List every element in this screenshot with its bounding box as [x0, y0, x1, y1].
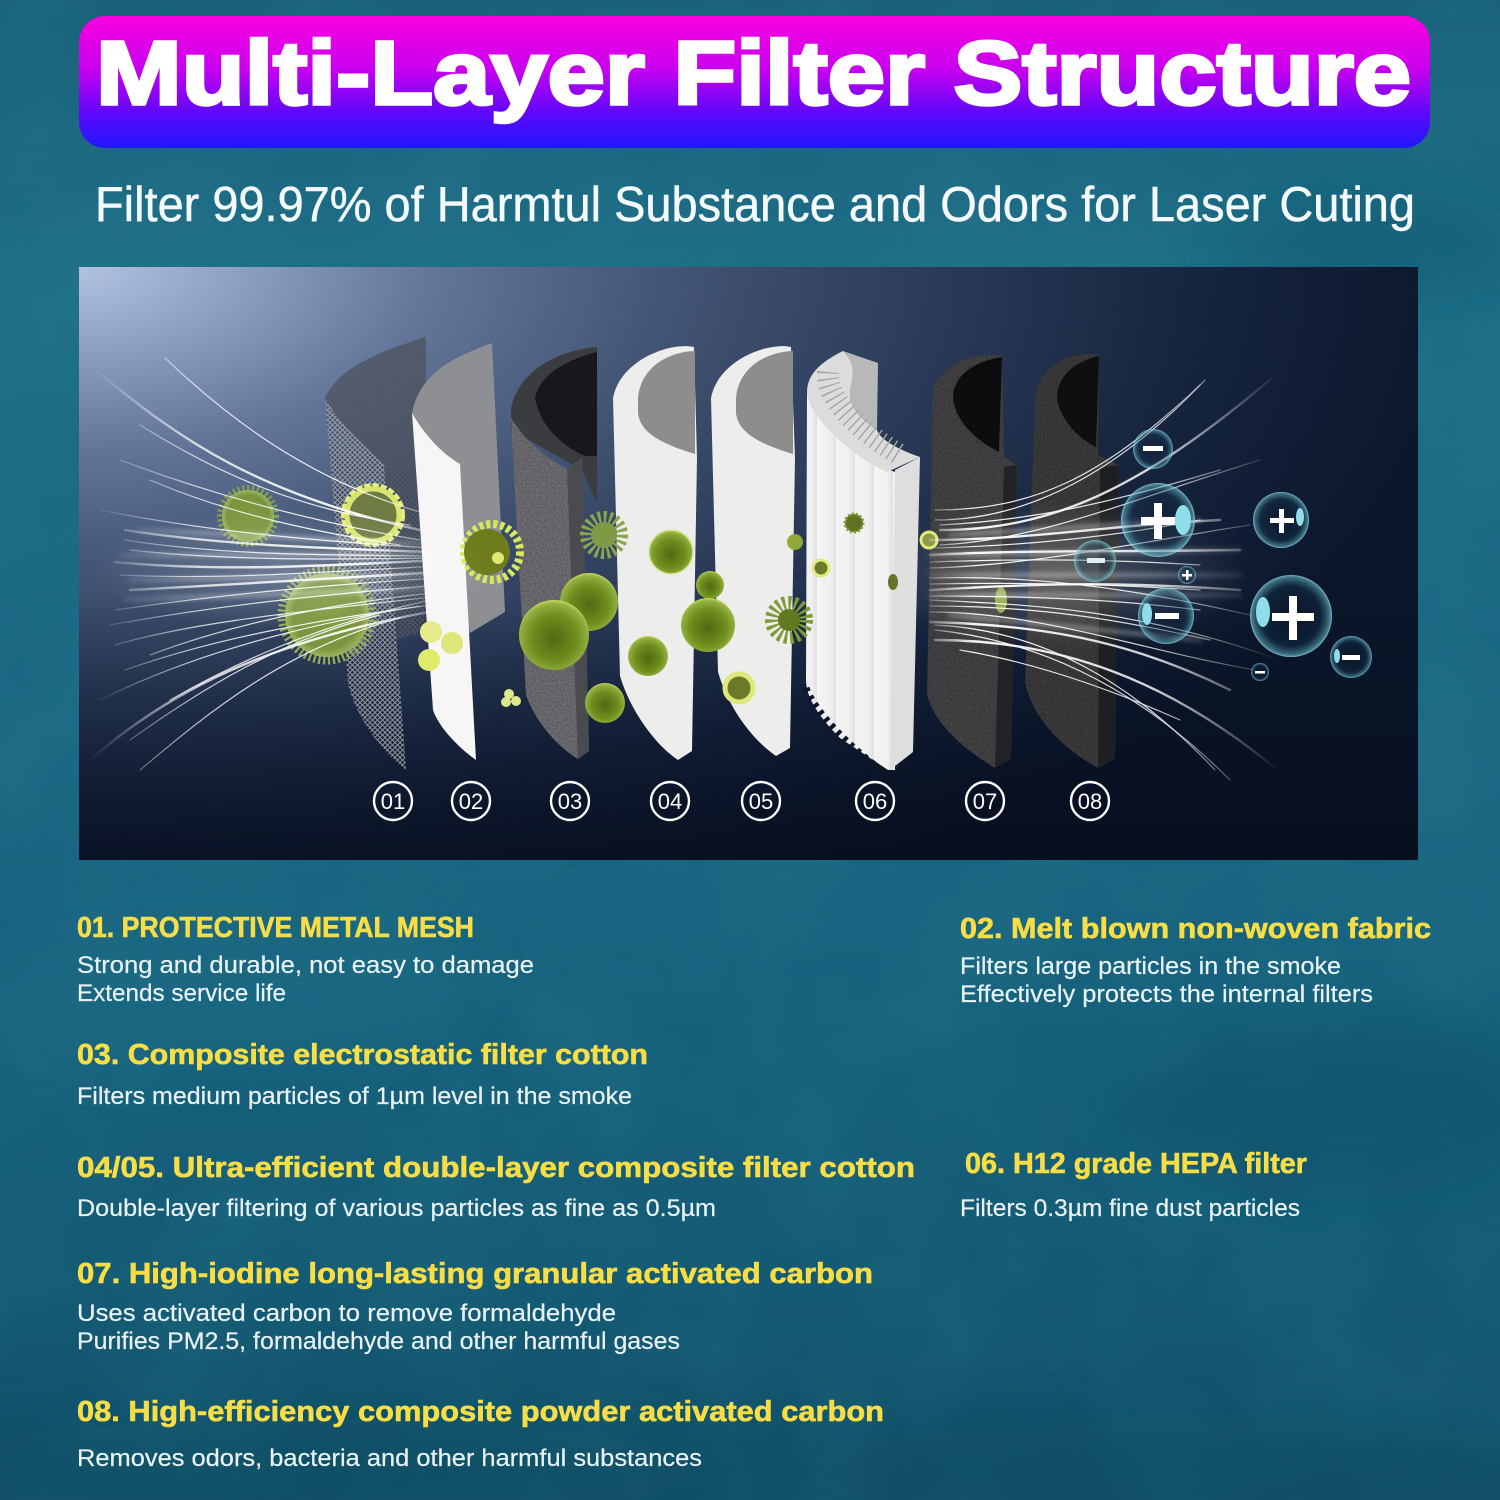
panel: filter layers diagram: [79, 267, 1418, 860]
text block: 01: 01. PROTECTIVE METAL MESH: [77, 912, 474, 944]
yellow pollen clusters: [418, 621, 521, 707]
text block: 08: 08. High-efficiency composite powder activated carbon: [77, 1396, 884, 1428]
number 05: [742, 782, 780, 820]
layer numbers: [374, 782, 1109, 820]
text block: 04/05: [77, 1152, 915, 1222]
number 07: [966, 782, 1004, 820]
ion: tiny plus: [1178, 566, 1196, 584]
subtitle: Filter 99.97% of Harmtul Substance and Odors for Laser Cuting: [95, 178, 1415, 232]
text block: 01: Extends service life: [77, 980, 286, 1007]
germ: large spiky: [285, 573, 369, 657]
ion: minus right: [1330, 636, 1372, 678]
ion: faint minus: [1074, 540, 1116, 582]
text block: 07: [77, 1258, 873, 1355]
text block: 08: Removes odors, bacteria and other harmful substances: [77, 1445, 702, 1472]
germ: ringed on layer 05: [725, 674, 753, 702]
text block: 07: Uses activated carbon to remove formaldehyde: [77, 1300, 616, 1327]
text block: 07: Purifies PM2.5, formaldehyde and other harmful gases: [77, 1328, 680, 1355]
number 01: 01: [381, 789, 405, 814]
number 01: [374, 782, 412, 820]
germ: left spiky: [222, 490, 274, 542]
filter layer 03: electrostatic cotton: [511, 347, 597, 759]
number 02: 02: [459, 789, 483, 814]
title: Multi-Layer Filter Structure: [96, 24, 1411, 124]
ion: medium minus: [1138, 588, 1194, 644]
dust specks on layer 06: [787, 514, 1007, 613]
text block: 03: [77, 1039, 648, 1110]
germ: ringed on mesh: [344, 486, 402, 544]
germ: cluster behind 04: [696, 571, 724, 599]
number 07: 07: [973, 789, 997, 814]
text block: 02: Filters large particles in the smoke: [960, 953, 1341, 980]
text block: 06: 06. H12 grade HEPA filter: [965, 1148, 1307, 1180]
filter layer 05: composite cotton: [711, 346, 795, 756]
ion: large plus: [1121, 483, 1195, 557]
text block: 06: Filters 0.3µm fine dust particles: [960, 1195, 1300, 1222]
text block: 04/05: 04/05. Ultra-efficient double-layer composite filter cotton: [77, 1152, 915, 1184]
air flow glow: [90, 500, 1250, 650]
text block: 03: Filters medium particles of 1µm level in the smoke: [77, 1083, 632, 1110]
number 06: [856, 782, 894, 820]
filter layer 07: granular carbon: [927, 355, 1017, 768]
number 08: 08: [1078, 789, 1102, 814]
ion: big plus: [1250, 575, 1332, 657]
number 06: 06: [863, 789, 887, 814]
particles: germs and dust: [222, 486, 1007, 723]
text block: 03: 03. Composite electrostatic filter cotton: [77, 1039, 648, 1071]
text block: 04/05: Double-layer filtering of various particles as fine as 0.5µm: [77, 1195, 716, 1222]
ion: tiny minus: [1251, 663, 1269, 681]
air flow lines: exhaust: [930, 378, 1280, 780]
text block: 07: 07. High-iodine long-lasting granular activated carbon: [77, 1258, 873, 1290]
filter layer 08: powder carbon: [1025, 354, 1119, 768]
ion: minus: [1133, 429, 1173, 469]
number 04: [651, 782, 689, 820]
text block: 06: [960, 1148, 1307, 1222]
germ: corona virus: [464, 524, 520, 580]
number 03: 03: [558, 789, 582, 814]
ion bubbles: [1074, 429, 1372, 681]
text block: 02: [960, 913, 1431, 1008]
number 03: [551, 782, 589, 820]
number 05: 05: [749, 789, 773, 814]
germ: bacteria balls: [519, 530, 735, 723]
text block: 01: Strong and durable, not easy to damage: [77, 952, 534, 979]
title banner: [79, 16, 1430, 148]
number 08: [1071, 782, 1109, 820]
germ: spiky on layer 05: [774, 605, 804, 635]
air flow lines: intake: [90, 358, 440, 770]
germ: spiky by layer 03: [588, 519, 620, 551]
filter layer 02: melt blown fabric: [412, 343, 505, 760]
number 02: [452, 782, 490, 820]
number 04: 04: [658, 789, 682, 814]
filter layer 04: composite cotton: [613, 346, 697, 760]
text block: 02: 02. Melt blown non-woven fabric: [960, 913, 1431, 945]
text block: 01: [77, 912, 534, 1007]
filter layer 06: pleated HEPA: [806, 351, 920, 772]
filter layer 01: metal mesh: [325, 337, 426, 770]
text block: 02: Effectively protects the internal filters: [960, 981, 1373, 1008]
text block: 08: [77, 1396, 884, 1472]
ion: medium plus: [1253, 492, 1309, 548]
